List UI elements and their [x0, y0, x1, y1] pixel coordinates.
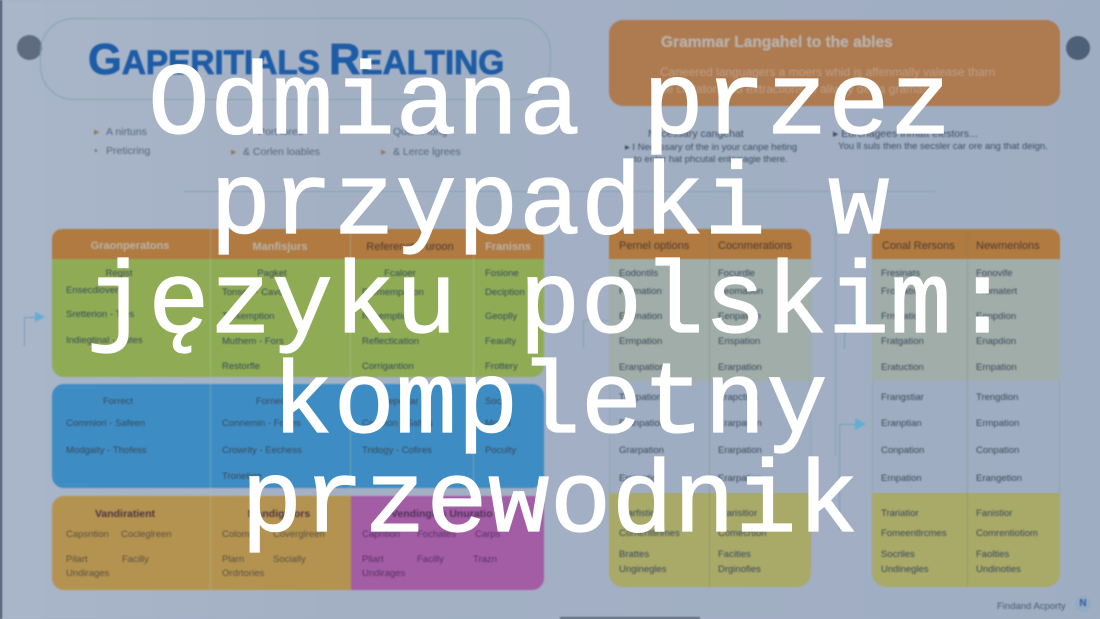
yellow block: Comrentiotiom	[976, 528, 1038, 538]
blue row: Commiori - Safeen	[66, 418, 145, 428]
green row: Premempation	[362, 286, 424, 298]
gold row: Plarn	[222, 554, 244, 564]
blue row: Crowrity - Eechess	[222, 444, 302, 456]
panel: orange callout	[609, 20, 1060, 106]
pale green block: Fratgation	[881, 336, 924, 346]
gold row: Cocleglreen	[121, 528, 172, 540]
pale green block: Ernpation	[976, 362, 1017, 372]
blue grey block: Erarpation	[718, 472, 762, 484]
bullet list: left: & Lerce lgrees	[393, 146, 461, 158]
blue grey block: Ermpation	[619, 472, 662, 484]
green row: Sretterion - Tres	[66, 308, 134, 320]
blue grey block: Ernpation	[881, 472, 922, 484]
pale green block: Enapdion	[976, 336, 1016, 346]
blue grey block: Trarpation	[619, 392, 662, 402]
blue row: Tronetige	[222, 470, 262, 482]
pale green block: Eonpdion	[976, 310, 1016, 322]
yellow block: Trarfistion	[619, 508, 661, 518]
blue grey block: Trengdion	[976, 392, 1018, 402]
pale green block: Eenpation	[718, 310, 761, 322]
green row: Frottery	[485, 360, 518, 372]
title: przewodnik	[241, 446, 859, 562]
yellow block: Facities	[718, 548, 751, 560]
pale green block: Fonovife	[976, 268, 1012, 278]
notes: right: Necessary cangehat	[648, 128, 744, 140]
notes: right: ▸ Eurchagees Inmatt elestors...	[833, 128, 978, 140]
blue row	[52, 384, 544, 488]
bullet list: left	[93, 126, 461, 158]
pale green block: Fromation	[881, 286, 924, 296]
notes: right: You ll suls then the secsler car ore ang that deign.	[838, 140, 1048, 152]
gold row: Socially	[273, 554, 306, 564]
pale green block: Feomation	[718, 286, 763, 296]
header row: Pernel options	[619, 240, 689, 252]
gold row: Coverglreen	[273, 528, 325, 540]
arrow: left table	[23, 312, 45, 346]
green row: Pagket	[257, 268, 287, 278]
notes: right	[624, 128, 1048, 165]
yellow block: Brattes	[619, 548, 649, 560]
pale green block: Eratuction	[881, 362, 924, 372]
title: języku polskim:	[86, 247, 1014, 363]
blue grey block: Eranptian	[881, 418, 922, 428]
poster heading: GAPERITIALS REALTING	[88, 35, 504, 84]
header row: Newmenlons	[976, 240, 1040, 252]
green row: Restorfle	[222, 360, 260, 372]
pale green block: Erispation	[718, 336, 760, 346]
purple row	[351, 496, 544, 590]
green row: Fcaloer	[384, 268, 416, 278]
header row: Conal Rersons	[882, 240, 955, 252]
purple row: Capntion	[362, 528, 400, 540]
blue grey block	[609, 381, 811, 493]
pale green block: Frmpation	[881, 310, 924, 322]
purple row: Pliart	[362, 554, 384, 564]
title: kompletny	[272, 346, 828, 462]
callout text: de cedaton and extractions in aliway decla gramas.	[660, 82, 932, 96]
green row: Fosione	[485, 268, 519, 278]
blue row: Fornect	[256, 396, 288, 406]
purple row: Vendingies Unuratio	[391, 508, 493, 520]
notes: right: to enter hat phcutal enterragie there.	[634, 154, 788, 164]
blue grey block: Erapction	[718, 392, 758, 402]
icon: footer logo	[1075, 596, 1091, 612]
blue grey block	[872, 381, 1060, 493]
blue grey block: Erarpation	[718, 418, 762, 428]
pale green block: Eodontils	[619, 268, 658, 278]
bullet list: left: •	[94, 144, 98, 156]
panel: poster title	[40, 18, 551, 100]
gold row: Vandiratient	[95, 508, 155, 520]
yellow block	[609, 493, 811, 587]
purple row: Carps	[475, 528, 500, 540]
gold row: Mandigators	[248, 508, 310, 520]
yellow block: Socriles	[881, 548, 915, 560]
header row: Graonperatons	[91, 240, 169, 252]
icon: footer logo: N	[1079, 598, 1087, 609]
bullet list: left: ▸	[381, 146, 386, 158]
pale green block	[872, 259, 1060, 381]
pale green block: Erarpation	[718, 362, 762, 372]
callout text	[660, 65, 996, 96]
green row: Reflectication	[362, 336, 419, 346]
purple row: Facilly	[417, 554, 444, 564]
footer credit	[997, 596, 1090, 612]
green row: Ensecdiover	[66, 284, 118, 296]
green row: Deciption	[485, 286, 525, 298]
green row: Geoplly	[485, 310, 517, 322]
purple row: Trazn	[473, 554, 497, 564]
bullet list: left: ▸	[94, 126, 99, 138]
left edge shadow	[0, 0, 2, 619]
purple row: Fochates	[417, 528, 456, 540]
yellow block: Faolties	[976, 548, 1009, 560]
blue row: Socal	[485, 396, 509, 406]
yellow block: Undinoties	[976, 564, 1021, 574]
gold row	[52, 496, 351, 590]
bullet list: left: Preticring	[106, 144, 150, 156]
gold row: Ordrtories	[222, 568, 264, 578]
green row: Corrigantion	[362, 360, 414, 372]
gold row: Colomin	[222, 528, 257, 540]
bullet list: left: A nirtuns	[106, 126, 147, 138]
yellow block: Trarisitior	[718, 508, 757, 518]
blue grey block: Erangetion	[976, 472, 1022, 484]
blue row: Reportar	[382, 396, 418, 406]
arrow: right table upper	[844, 320, 856, 350]
bullet list: left: ▸	[231, 146, 236, 158]
callout heading: Grammar Langahel to the ables	[661, 34, 893, 51]
header row	[609, 229, 811, 259]
blue row: Modgaity - Thofess	[66, 444, 147, 456]
green row: Trexemption	[222, 310, 274, 322]
yellow block: Fanistior	[976, 508, 1012, 518]
yellow block: Comentlinmes	[619, 528, 680, 538]
bullet list: left: Port loree	[258, 126, 304, 138]
gold row: Capsntion	[66, 528, 109, 540]
bottom edge shadow	[560, 617, 700, 619]
panel: right table	[871, 228, 1061, 588]
yellow block: Trariatior	[881, 508, 919, 518]
title: Odmiana przez	[148, 48, 952, 164]
pale green block: Earmation	[619, 310, 662, 322]
yellow block: Undinegles	[881, 564, 929, 574]
header row	[872, 229, 1060, 259]
gold row: Facilly	[122, 554, 149, 564]
pale green block: Fresinats	[881, 268, 920, 278]
blue row: Forrect	[103, 396, 133, 406]
blue row: Conmon - Safies	[362, 418, 433, 428]
header row: Franisns	[485, 241, 531, 253]
gold row: Pilart	[66, 554, 88, 564]
blue grey block: Erarpation	[718, 444, 762, 456]
blue grey block: Eranpation	[619, 418, 665, 428]
yellow block: Fomeentlrcmes	[881, 528, 946, 538]
blue grey block: Frangstiar	[881, 392, 924, 402]
footer credit: Findand Acporty	[997, 600, 1066, 612]
pale green block: Eranpation	[619, 362, 665, 372]
green row: Feaulty	[485, 336, 516, 346]
pale green block: Formation	[619, 286, 662, 296]
blue grey block: Conpation	[881, 444, 924, 456]
pale green block	[609, 259, 811, 381]
blue row: Poculty	[485, 444, 516, 456]
purple row: Undirages	[362, 568, 405, 578]
bullet list: left: & Corlen loables	[243, 146, 320, 158]
title: przypadki w	[210, 148, 890, 264]
blue grey block: Grarpation	[619, 444, 664, 456]
gold row: Undirages	[66, 568, 109, 578]
icon: left pin	[17, 35, 42, 60]
yellow block: Drginofies	[718, 564, 761, 574]
header row: Cocnmerations	[718, 240, 792, 252]
blue grey block: Conpation	[976, 444, 1019, 456]
pale green block: Fromatert	[976, 286, 1017, 296]
green row: Regist	[106, 268, 132, 278]
icon: right pin	[1066, 36, 1090, 60]
notes: right: ▸ I Necessary of the in your canpe heting	[625, 142, 797, 152]
pale green block: Ermpation	[619, 336, 662, 346]
bullet list: left: Qualor long	[393, 126, 447, 138]
callout text: Caneered languagers a moers whid is affenmally valease tharn	[660, 65, 995, 79]
green row	[52, 259, 544, 377]
yellow block	[872, 493, 1060, 587]
green row: Rexemption	[362, 310, 413, 322]
panel: middle table	[608, 228, 812, 588]
pale green block: Focurdle	[718, 268, 755, 278]
arrow: right table lower	[838, 418, 866, 530]
green row: Tonsen - Cavor	[222, 286, 286, 298]
blue grey block: Ermpation	[976, 418, 1019, 428]
blue row: Connemin - Fortes	[222, 418, 301, 428]
yellow block: Unginegles	[619, 564, 667, 574]
yellow block: Comecrtion	[718, 528, 767, 538]
header row	[52, 229, 544, 259]
green row: Indiegtinal - Nutes	[66, 334, 143, 346]
blue row: Morial	[485, 418, 511, 428]
header row: Manfisjurs	[252, 241, 308, 253]
panel: left table	[51, 228, 545, 591]
blue row: Tridogy - Cofires	[362, 444, 432, 456]
header row: Referenctal uroon	[366, 241, 454, 253]
green row: Muthem - Fors	[222, 336, 284, 346]
